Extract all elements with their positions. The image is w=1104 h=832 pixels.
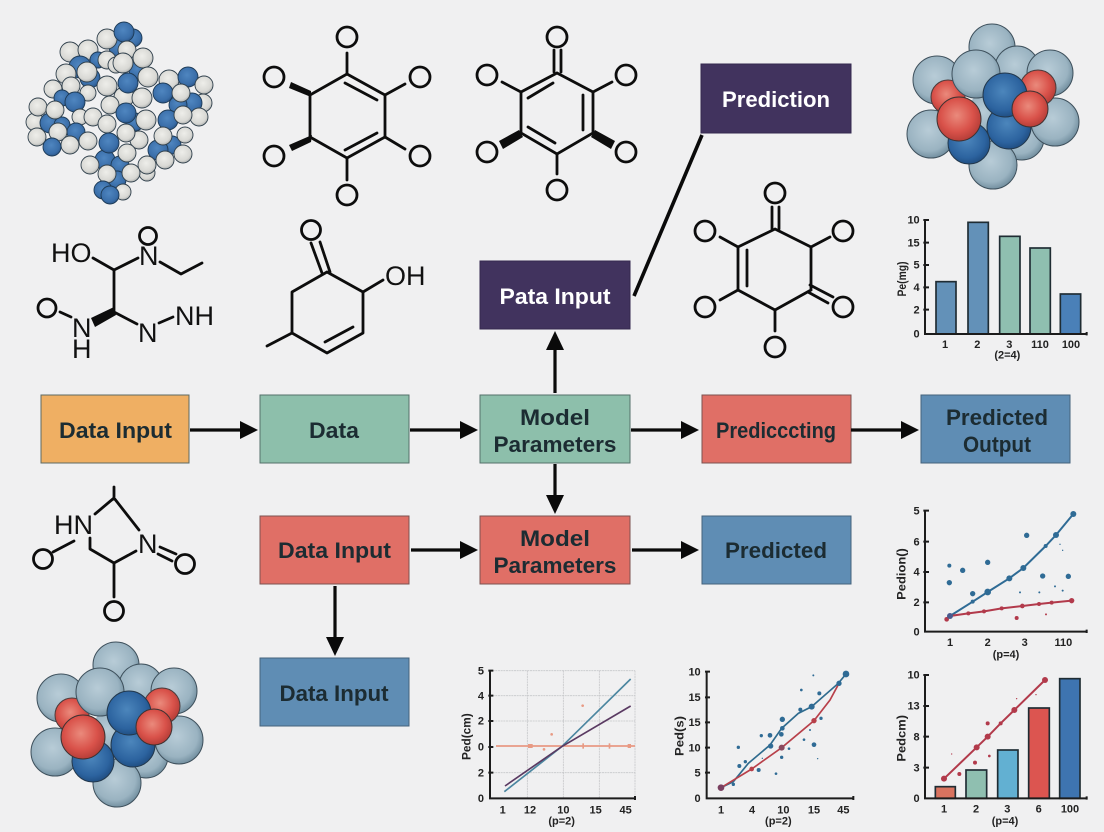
bar chart top right: (2=4) [994,350,1021,362]
line and scatter chart bottom centre right: 10 [688,742,701,754]
bar chart top right: 0 [914,329,920,341]
icon: ring molecule lower left: HN [54,510,93,540]
box: Predicccting red [702,395,851,463]
box: Predicccting red: Predicccting [716,418,836,443]
bar chart top right: Pe(mg) [895,261,909,296]
box: Predicted Output blue: Predicted [946,405,1048,430]
line and scatter chart bottom centre right: 4 [749,804,756,816]
connector line: Pata Input to Prediction [634,135,702,296]
box: Data Input orange [41,395,189,463]
line and scatter chart bottom centre right: 15 [688,717,701,729]
bar and line chart bottom right: (p=4) [992,816,1019,828]
box: Data Input red [260,516,409,584]
bar and line chart bottom right: 2 [973,804,979,816]
icon: cyclohexenone molecule [267,220,426,353]
line chart bottom centre: 2 [478,716,484,728]
line chart bottom centre: 0 [478,793,484,805]
line and scatter chart bottom centre right: 10 [777,804,789,816]
arrow: Predicting to Predicted Output [851,421,919,439]
bar chart top right: 15 [907,237,920,249]
icon: molecule ring top centre [477,27,636,200]
line chart bottom centre: 0 [478,742,484,754]
box: Model Parameters teal [480,395,630,463]
icon: molecule ring right [695,183,853,357]
line and scatter chart middle right: 2 [914,597,920,609]
line and scatter chart middle right: 0 [914,626,920,638]
arrow: down to Model Parameters lower [546,464,564,514]
box: Data teal: Data [309,418,360,443]
box: Model Parameters teal: Parameters [494,432,616,457]
box: Data Input blue [260,658,409,726]
box: Predicted blue: Predicted [725,538,827,563]
icon: chain molecule left: N [72,313,92,343]
box: Data Input red: Data Input [278,538,392,563]
bar and line chart bottom right: 6 [1036,804,1042,816]
line and scatter chart bottom centre right: 5 [695,767,701,779]
bar chart top right: 10 [907,215,920,227]
line chart bottom centre: Ped(cm) [460,713,474,760]
bar and line chart bottom right: 3 [914,762,920,774]
box: Model Parameters teal: Model [520,405,590,430]
box: Prediction [701,64,851,133]
line and scatter chart bottom centre right: 45 [837,804,849,816]
bar chart top right: 100 [1062,339,1080,351]
line and scatter chart middle right: (p=4) [993,649,1020,661]
line chart bottom centre: 10 [557,804,569,816]
line chart bottom centre: 15 [590,804,602,816]
line and scatter chart bottom centre right: 1 [718,804,724,816]
bar and line chart bottom right [894,670,1087,828]
bar and line chart bottom right: 10 [907,670,920,682]
bar and line chart bottom right: 13 [907,701,920,713]
bar and line chart bottom right: 0 [914,793,920,805]
line and scatter chart middle right: 2 [985,637,991,649]
bar and line chart bottom right: 8 [914,731,920,743]
icon: protein sphere cluster top right [907,24,1079,189]
icon: chain molecule left: N [139,241,158,271]
arrow: Model Parameters to Predicting [631,421,699,439]
line chart bottom centre: 12 [524,804,536,816]
bar and line chart bottom right: 1 [941,804,947,816]
icon: cyclohexenone molecule: OH [385,261,426,291]
arrow: Data Input to Model Parameters lower [411,541,478,559]
line and scatter chart middle right: 6 [914,536,920,548]
line and scatter chart bottom centre right [672,666,853,828]
bar chart top right: 4 [914,282,921,294]
bar and line chart bottom right: Pedcm) [894,715,908,762]
bar and line chart bottom right: 100 [1061,804,1079,816]
line and scatter chart bottom centre right: Ped(s) [672,716,686,756]
line chart bottom centre: 45 [620,804,632,816]
box: Pata Input: Pata Input [500,284,611,309]
arrow: Model Parameters to Predicted lower [632,541,699,559]
line and scatter chart middle right: 110 [1054,637,1072,649]
line chart bottom centre: 4 [478,690,485,702]
line and scatter chart middle right [894,505,1087,661]
line and scatter chart bottom centre right: (p=2) [765,816,792,828]
line and scatter chart bottom centre right: 15 [688,692,701,704]
line and scatter chart bottom centre right: 10 [688,666,701,678]
line chart bottom centre: 1 [500,804,506,816]
icon: molecule ring top left [264,27,430,205]
arrow: Data to Model Parameters [410,421,478,439]
bar and line chart bottom right: 3 [1004,804,1010,816]
icon: chain molecule left: N [138,318,158,348]
box: Predicted blue [702,516,851,584]
icon: ring molecule lower left: N [138,529,158,559]
box: Pata Input [480,261,630,329]
bar chart top right: 110 [1031,339,1049,351]
arrow: Data Input to Data [190,421,258,439]
line and scatter chart bottom centre right: 15 [808,804,820,816]
box: Model Parameters red [480,516,630,584]
box: Predicted Output blue [921,395,1070,463]
line and scatter chart middle right: 3 [1022,637,1028,649]
line and scatter chart bottom centre right: 0 [695,793,701,805]
icon: chain molecule left [38,228,214,364]
icon: ring molecule lower left [34,487,194,620]
icon: chain molecule left: H [72,334,92,364]
arrow: down to Data Input blue [326,586,344,656]
line and scatter chart middle right: 5 [914,505,920,517]
box: Prediction: Prediction [722,87,830,112]
line chart bottom centre [460,665,635,828]
arrow: up to Pata Input [546,331,564,393]
bar chart top right: 1 [942,339,948,351]
line and scatter chart middle right: 4 [914,567,921,579]
box: Data Input blue: Data Input [280,681,389,706]
line chart bottom centre: 2 [478,767,484,779]
bar chart top right [895,215,1087,362]
box: Data Input orange: Data Input [59,418,173,443]
line and scatter chart middle right: 1 [947,637,953,649]
bar chart top right: 5 [914,260,920,272]
icon: chain molecule left: NH [175,301,214,331]
box: Predicted Output blue: Output [963,432,1032,457]
icon: chain molecule left: HO [51,238,92,268]
line chart bottom centre: 5 [478,665,484,677]
bar chart top right: 2 [914,304,920,316]
line and scatter chart middle right: Pedion() [894,548,908,600]
icon: blue and white atom cloud [26,22,213,204]
bar chart top right: 3 [1006,339,1012,351]
icon: protein sphere cluster bottom left [31,642,203,807]
line chart bottom centre: (p=2) [548,816,575,828]
box: Model Parameters red: Parameters [494,553,616,578]
bar chart top right: 2 [974,339,980,351]
box: Data teal [260,395,409,463]
box: Model Parameters red: Model [520,526,590,551]
